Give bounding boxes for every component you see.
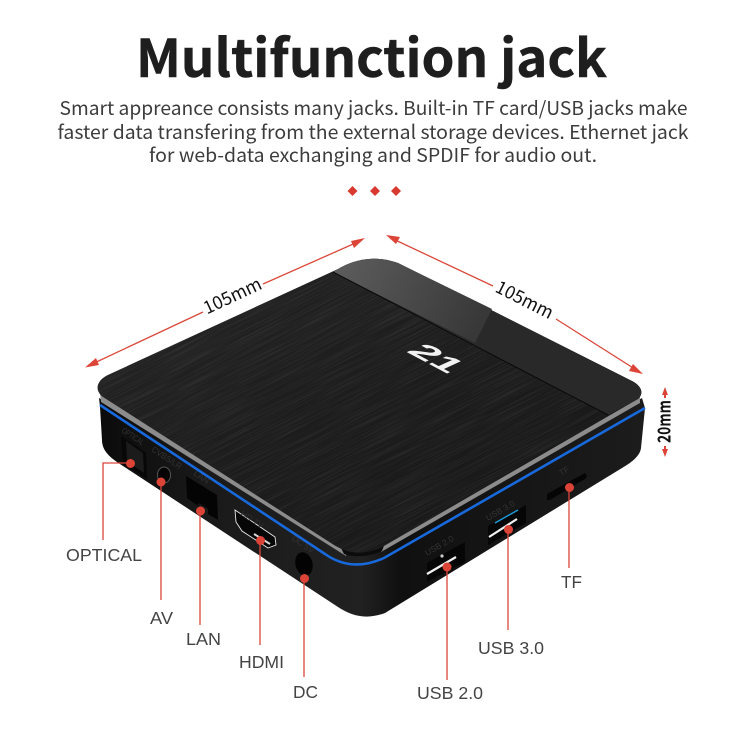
title: Multifunction jack	[136, 17, 608, 92]
description text	[58, 94, 689, 168]
blue light strip	[100, 405, 645, 564]
dimension: height: 20mm	[650, 400, 676, 443]
product: TV box	[98, 258, 646, 617]
port: TF: TF	[557, 464, 571, 478]
callout: DC: DC	[293, 682, 318, 702]
callout: LAN	[186, 506, 221, 649]
port: USB 3.0	[484, 498, 526, 545]
port: HDMI	[235, 508, 276, 548]
port: DC: DC 5V	[290, 533, 317, 555]
logo: 21	[399, 340, 473, 377]
callout: OPTICAL	[66, 459, 142, 565]
callout: TF	[561, 483, 582, 592]
dark rear panel	[333, 259, 641, 415]
box top surface	[98, 259, 641, 553]
bottom corner of lid	[340, 543, 385, 556]
port: USB 3.0: USB 3.0	[484, 498, 517, 523]
callout: AV	[150, 478, 173, 628]
brushed metal texture	[98, 276, 598, 552]
dimension: width: 105mm	[199, 270, 266, 320]
glossy corner panel	[333, 259, 492, 343]
description text: for web-data exchanging and SPDIF for audio out.	[149, 141, 597, 168]
callout: LAN: LAN	[186, 629, 221, 649]
decorative red diamonds	[348, 186, 401, 196]
callout: OPTICAL: OPTICAL	[66, 545, 142, 565]
port: USB 2.0: USB 2.0	[423, 533, 456, 558]
description text: faster data transfering from the external storage devices. Ethernet jack	[58, 118, 689, 145]
port: USB 2.0	[423, 533, 465, 582]
dimension: depth	[386, 235, 643, 374]
port: DC	[290, 533, 317, 578]
callout: USB 2.0: USB 2.0	[417, 683, 483, 703]
callout: USB 2.0	[417, 562, 483, 703]
callout: USB 3.0: USB 3.0	[478, 638, 544, 658]
port: AV	[150, 444, 184, 483]
panel seam	[333, 272, 608, 415]
dimension: depth: 105mm	[491, 273, 558, 325]
port: LAN: LAN	[192, 468, 211, 486]
callout: USB 3.0	[478, 525, 544, 658]
port: TF	[547, 464, 587, 500]
callout: AV: AV	[150, 608, 173, 628]
callout: HDMI: HDMI	[239, 652, 284, 672]
gray bevel strips	[100, 393, 640, 556]
callout: TF: TF	[561, 572, 582, 592]
dimension: width	[85, 238, 365, 368]
callout: DC	[293, 574, 318, 702]
port: HDMI: HD TV	[239, 508, 266, 531]
port: optical	[120, 425, 147, 479]
port: AV: CVBS/LR	[150, 444, 184, 471]
description text: Smart appreance consists many jacks. Built-in TF card/USB jacks make	[60, 94, 688, 121]
callout: HDMI	[239, 536, 284, 672]
port: LAN	[186, 468, 218, 520]
box side body	[99, 398, 645, 617]
port: optical: OPTICAL	[120, 425, 146, 447]
